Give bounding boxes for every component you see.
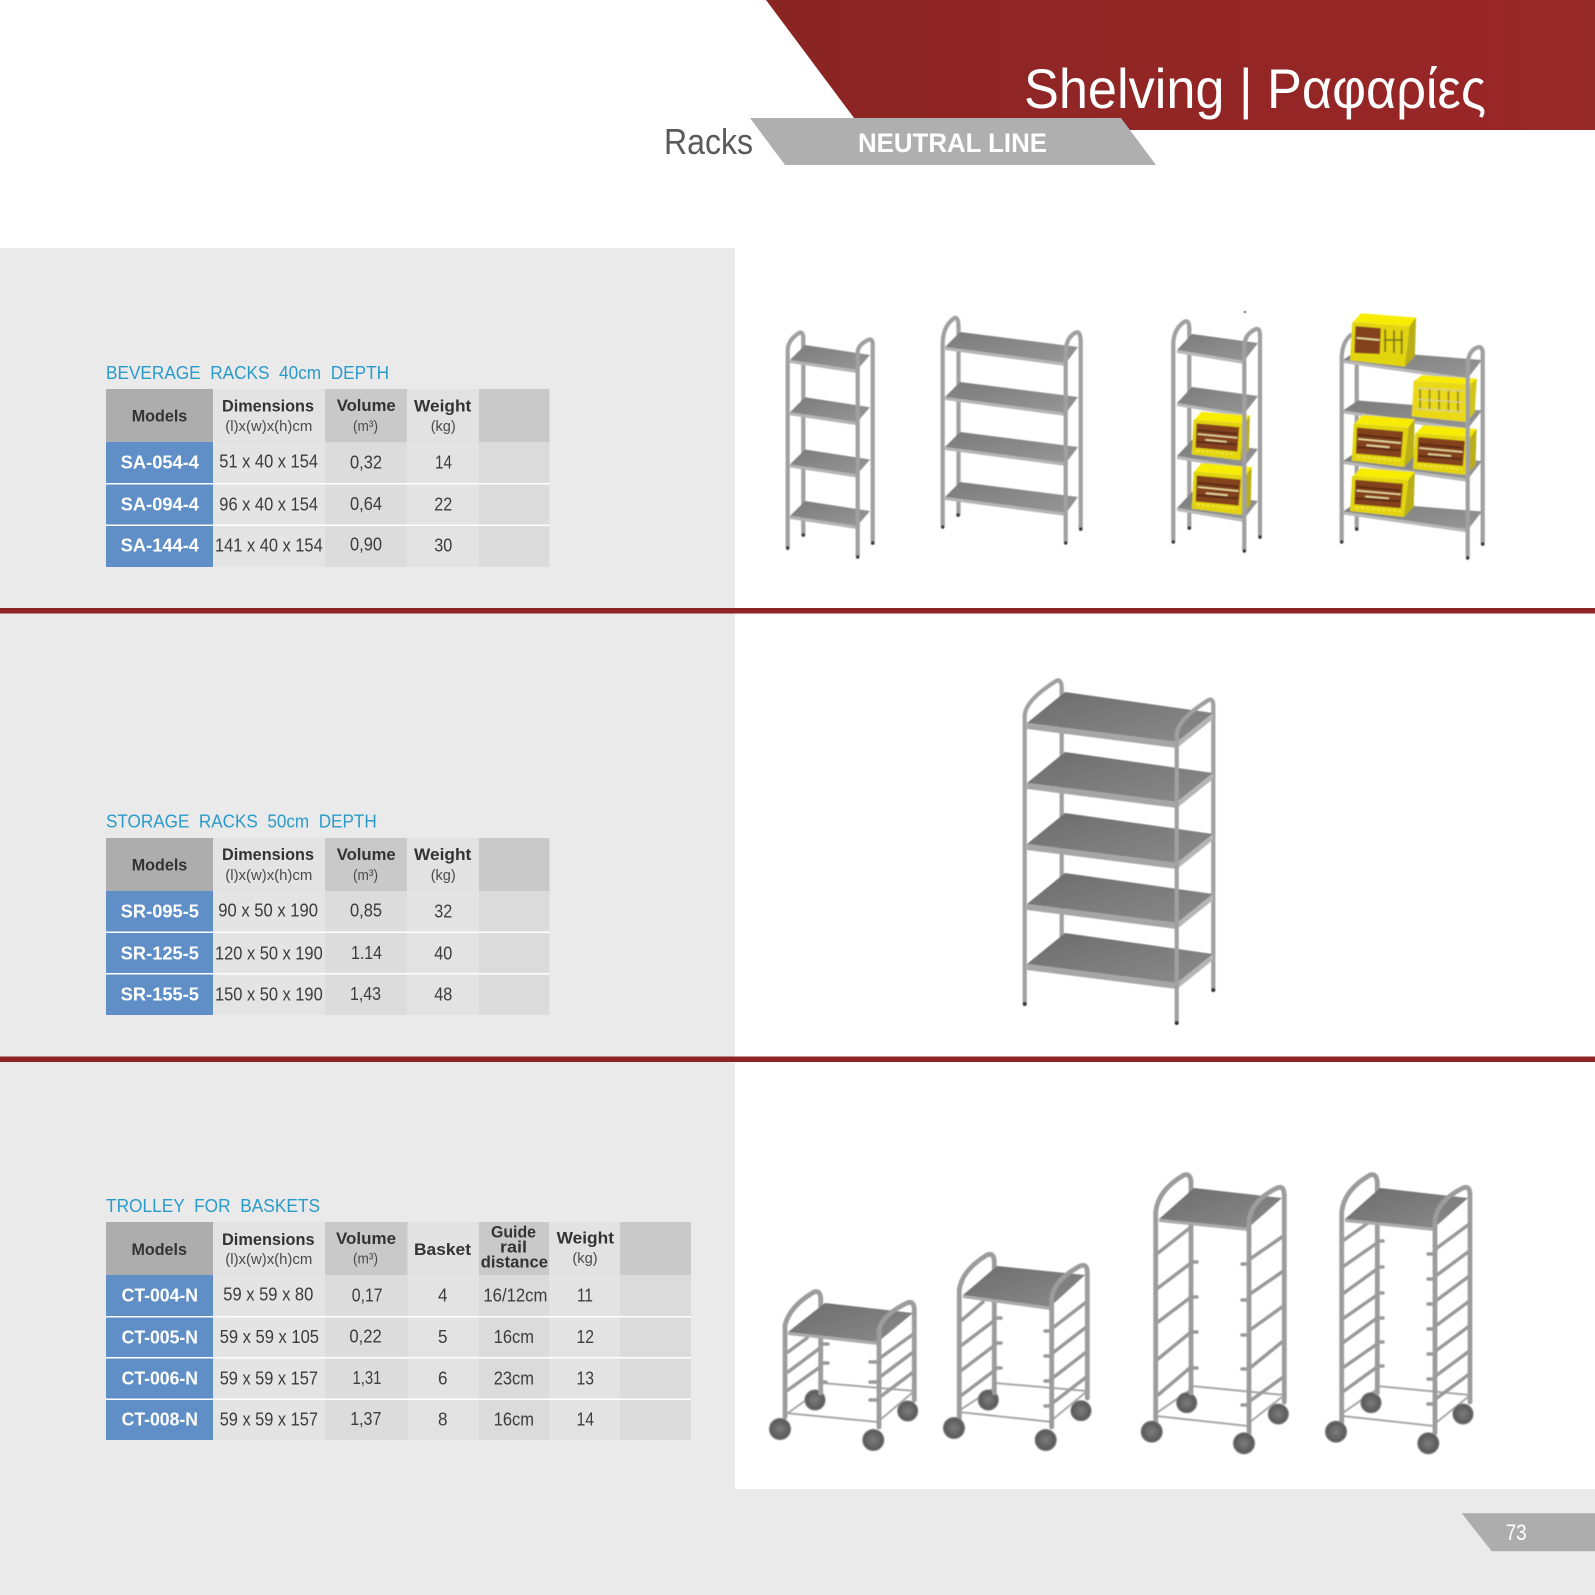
row SR-125-5	[121, 943, 452, 963]
row CT-005-N: 16cm	[494, 1327, 534, 1347]
divider 1	[0, 608, 1595, 614]
product: trolley 4 baskets	[770, 1292, 918, 1450]
row CT-004-N: 16/12cm	[483, 1286, 547, 1306]
header labels: Dimensions	[222, 845, 314, 864]
row SA-094-4: 22	[434, 495, 452, 515]
row CT-005-N: 5	[438, 1327, 448, 1347]
header labels: Volume	[337, 396, 396, 415]
divider 2	[0, 1056, 1595, 1062]
bottom grey band	[0, 1489, 1595, 1595]
header labels: (kg)	[431, 867, 456, 884]
row SR-125-5: 120 x 50 x 190	[215, 943, 323, 963]
page number tab	[1462, 1513, 1595, 1551]
row SA-094-4	[121, 494, 452, 515]
header labels: Dimensions	[222, 397, 314, 416]
header labels: rail	[500, 1238, 527, 1257]
row CT-006-N: 13	[576, 1369, 594, 1389]
column backgrounds	[106, 838, 550, 1015]
header labels: (l)x(w)x(h)cm	[225, 1251, 312, 1268]
header labels: Weight	[557, 1229, 614, 1248]
row SR-155-5: 48	[434, 985, 452, 1005]
row CT-004-N: 59 x 59 x 80	[223, 1285, 313, 1305]
row SA-054-4: 14	[435, 452, 452, 472]
row CT-005-N	[122, 1327, 594, 1347]
left grey panel	[0, 248, 735, 1595]
row CT-006-N: CT-006-N	[122, 1369, 198, 1389]
header banner	[766, 0, 1595, 130]
row SA-094-4: SA-094-4	[121, 495, 199, 515]
row SR-095-5: 32	[434, 901, 452, 921]
row CT-006-N: 6	[438, 1369, 448, 1389]
table: storage racks	[106, 812, 550, 1015]
row SR-155-5: 1,43	[350, 984, 381, 1004]
header labels: Basket	[414, 1240, 471, 1259]
row CT-008-N: 8	[438, 1410, 448, 1430]
header labels: Models	[132, 1240, 187, 1259]
product: wide beverage rack	[941, 318, 1082, 545]
row SA-054-4	[121, 452, 452, 472]
crate upper	[1192, 412, 1250, 460]
title: Shelving | Ραφαρίες	[1024, 57, 1486, 120]
row SR-125-5: SR-125-5	[121, 943, 199, 963]
row CT-008-N: 14	[576, 1410, 594, 1430]
product: trolley 6 baskets	[1141, 1175, 1288, 1454]
header labels: (l)x(w)x(h)cm	[225, 418, 312, 435]
header labels	[132, 396, 472, 435]
row SR-125-5: 1.14	[351, 943, 382, 963]
row CT-008-N	[122, 1409, 594, 1430]
header labels: (kg)	[572, 1250, 598, 1267]
crate lower	[1192, 463, 1252, 515]
crate middle right	[1413, 425, 1477, 475]
row CT-004-N: 4	[438, 1286, 448, 1306]
header labels: (m³)	[353, 867, 378, 884]
header labels: Weight	[414, 845, 472, 864]
row SA-144-4: 0,90	[350, 535, 382, 555]
header labels: Dimensions	[222, 1230, 315, 1249]
product: wide rack with crates	[1340, 313, 1484, 560]
header labels: Weight	[414, 397, 472, 416]
row CT-006-N	[122, 1368, 594, 1389]
header labels: (l)x(w)x(h)cm	[225, 867, 312, 884]
row SA-094-4: 0,64	[350, 494, 382, 514]
row CT-005-N: 0,22	[349, 1327, 382, 1347]
heading: beverage racks: BEVERAGE RACKS 40cm DEPTH	[106, 363, 389, 383]
row CT-004-N	[122, 1285, 593, 1306]
product: trolley 5 baskets	[944, 1254, 1091, 1450]
header labels: (m³)	[353, 1250, 378, 1267]
row SA-144-4: 30	[434, 536, 452, 556]
row SA-054-4: 0,32	[350, 452, 382, 472]
header labels: Models	[132, 856, 187, 875]
row CT-008-N: 16cm	[494, 1410, 534, 1430]
column backgrounds	[106, 1222, 691, 1440]
column backgrounds	[106, 389, 550, 567]
row SR-155-5: SR-155-5	[121, 985, 199, 1005]
table: beverage racks	[106, 363, 550, 567]
row SA-094-4: 96 x 40 x 154	[219, 495, 318, 515]
row SA-144-4: 141 x 40 x 154	[215, 536, 323, 556]
row SR-155-5	[121, 984, 452, 1005]
row CT-005-N: CT-005-N	[122, 1327, 198, 1347]
row CT-004-N: 0,17	[352, 1286, 383, 1306]
row CT-008-N: 59 x 59 x 157	[220, 1410, 318, 1430]
subtitle: racks: Racks	[664, 121, 753, 162]
row CT-006-N: 59 x 59 x 157	[220, 1369, 318, 1389]
row CT-006-N: 23cm	[494, 1369, 534, 1389]
row SR-095-5: 0,85	[350, 901, 382, 921]
header labels	[132, 1223, 614, 1272]
row CT-005-N: 59 x 59 x 105	[220, 1327, 319, 1347]
header labels: distance	[481, 1253, 548, 1272]
header labels: (kg)	[431, 418, 456, 435]
row CT-006-N: 1,31	[352, 1368, 381, 1388]
row SR-095-5: SR-095-5	[121, 901, 199, 921]
row CT-005-N: 12	[576, 1327, 594, 1347]
row SR-095-5	[121, 901, 452, 921]
row CT-008-N: CT-008-N	[122, 1410, 198, 1430]
product: storage rack	[1023, 680, 1215, 1025]
product: trolley 8 baskets	[1326, 1175, 1473, 1454]
row CT-004-N: 11	[577, 1286, 593, 1306]
crate bottom left	[1350, 468, 1415, 517]
row SA-144-4	[121, 535, 452, 556]
heading: storage racks: STORAGE RACKS 50cm DEPTH	[106, 812, 377, 832]
product: narrow beverage rack	[786, 333, 874, 559]
row SA-054-4: SA-054-4	[121, 452, 199, 472]
row SA-144-4: SA-144-4	[121, 536, 199, 556]
row CT-004-N: CT-004-N	[122, 1286, 198, 1306]
header labels: (m³)	[353, 418, 378, 435]
row CT-008-N: 1,37	[350, 1409, 381, 1429]
page number tab: 73	[1506, 1520, 1527, 1545]
header labels: Volume	[336, 1229, 396, 1248]
header labels: Volume	[337, 845, 396, 864]
row SR-125-5: 40	[434, 943, 452, 963]
neutral line ribbon	[750, 118, 1156, 165]
product: narrow rack with crates	[1172, 311, 1262, 553]
table: trolley for baskets	[106, 1196, 691, 1440]
header labels: Models	[132, 407, 187, 426]
heading: trolley for baskets: TROLLEY FOR BASKETS	[106, 1196, 320, 1216]
header labels	[132, 845, 472, 884]
row SR-095-5: 90 x 50 x 190	[218, 901, 318, 921]
row SA-054-4: 51 x 40 x 154	[219, 452, 318, 472]
crate top left	[1350, 313, 1416, 367]
header labels: Guide	[491, 1223, 536, 1242]
crate top right	[1412, 375, 1477, 422]
row SR-155-5: 150 x 50 x 190	[215, 985, 323, 1005]
neutral line ribbon: NEUTRAL LINE	[858, 128, 1047, 158]
crate middle left	[1352, 415, 1415, 467]
